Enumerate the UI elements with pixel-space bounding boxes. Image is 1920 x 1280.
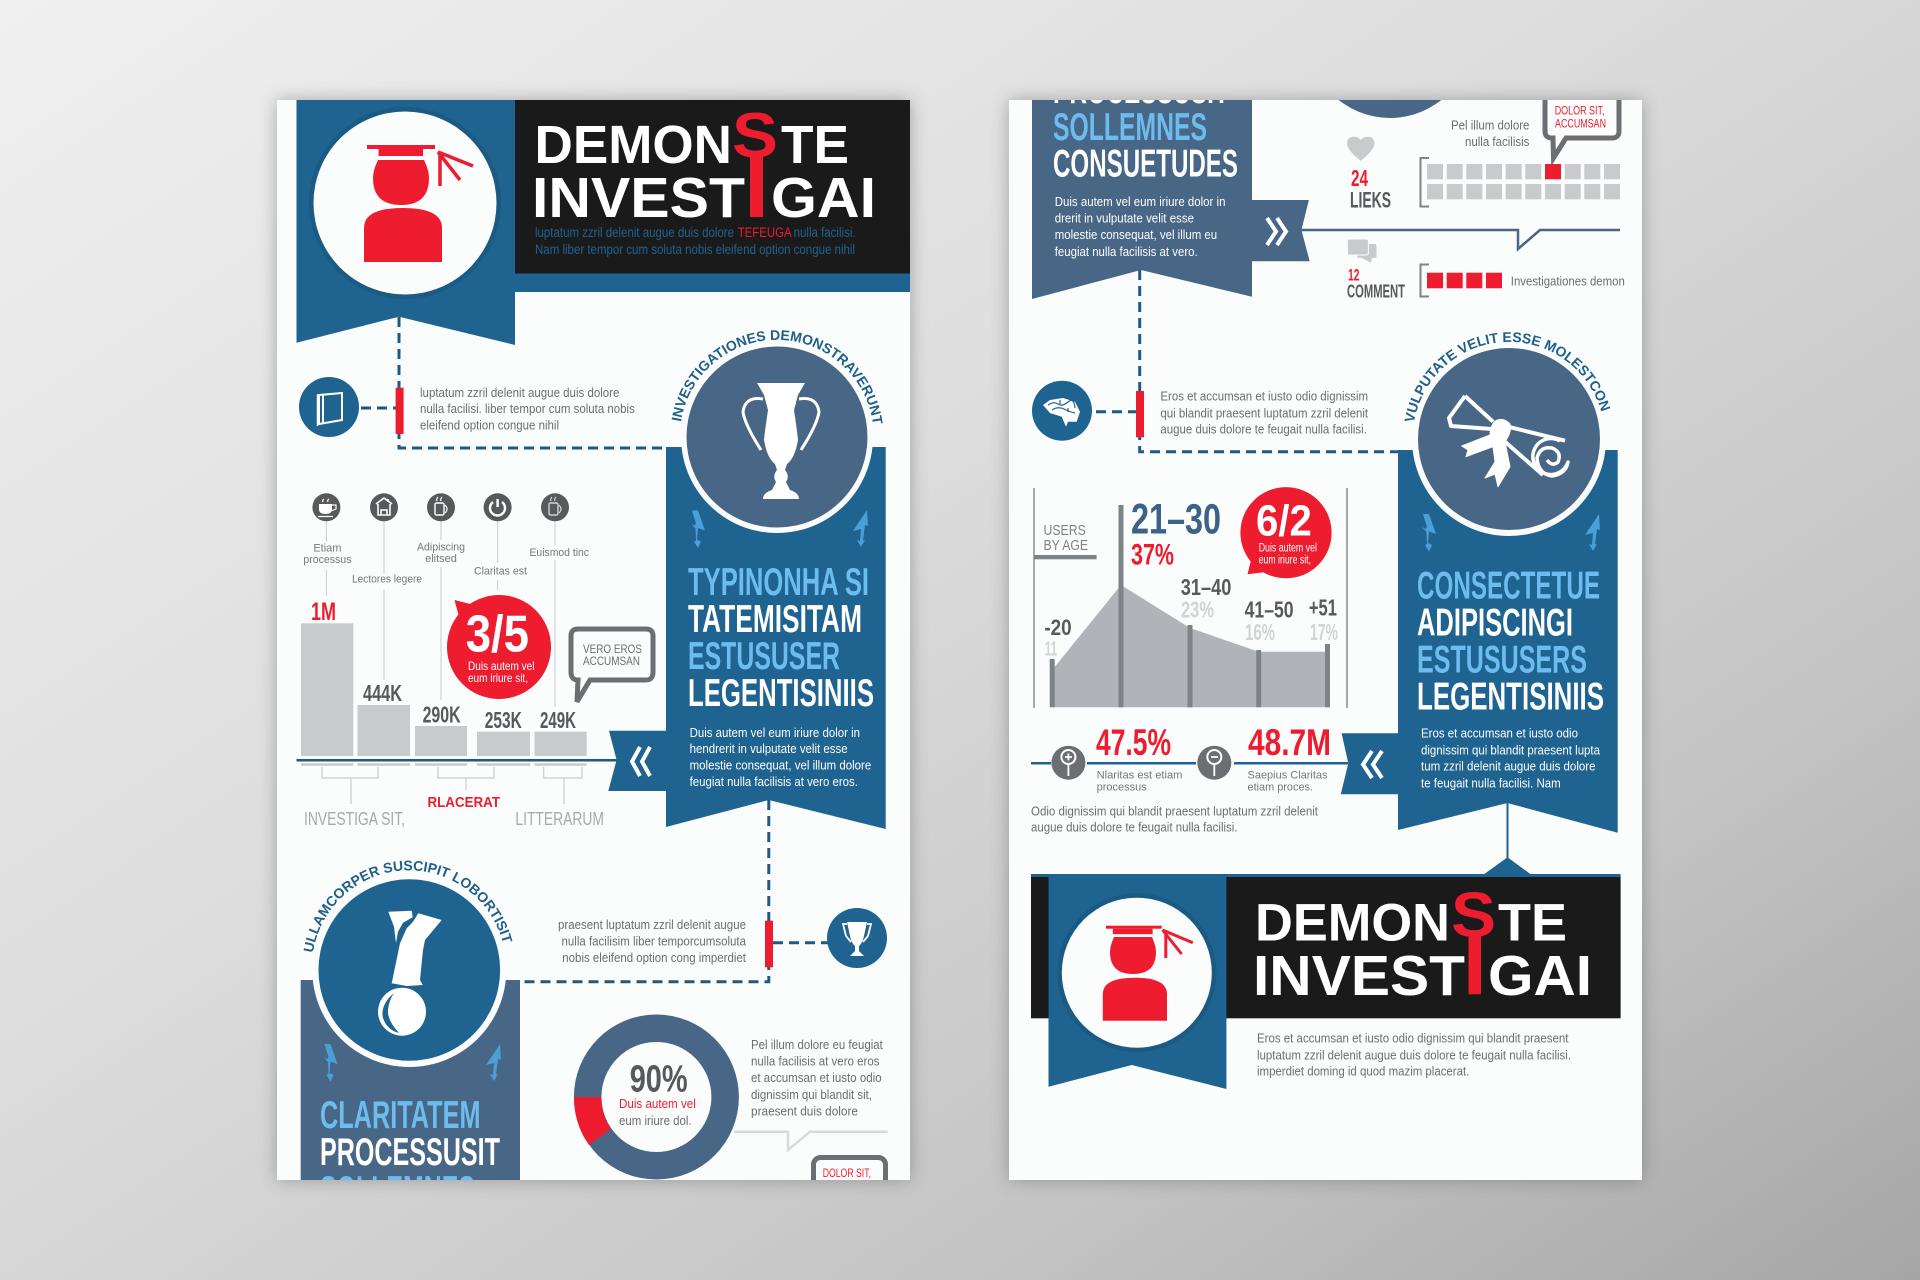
text block 3: qui blandit praesent luptatum zzril delenit: [1160, 405, 1368, 420]
speech line: [734, 1132, 888, 1150]
callout: vero eros: [571, 629, 653, 702]
title: DEMON: [1255, 894, 1450, 953]
age labels: +51: [1309, 595, 1337, 621]
title: S: [1451, 880, 1496, 950]
bar values: 1M: [311, 598, 336, 626]
stat captions: [1097, 770, 1328, 794]
callout labels: Claritas est: [474, 566, 527, 578]
bar group labels: INVESTIGA SIT,: [304, 809, 405, 829]
lightning bolts: [324, 1044, 501, 1082]
callout: dolor sit top: [1545, 90, 1619, 158]
comments value: 12: [1348, 266, 1360, 285]
callout: dolor sit top: ACCUMSAN: [1555, 116, 1606, 130]
donut chart: [574, 1014, 739, 1180]
donut description: et accumsan et iusto odio: [751, 1070, 882, 1085]
icon: diploma: [1449, 396, 1568, 487]
bar values: 444K: [363, 680, 402, 706]
icon: big trophy: [743, 383, 819, 499]
callout labels: Lectores legere: [352, 574, 422, 586]
age labels: -20: [1044, 615, 1072, 640]
heading: [321, 1101, 500, 1180]
text block 2: nobis eleifend option cong imperdiet: [562, 950, 746, 965]
red marker 3: [1136, 391, 1144, 437]
icon: mug 2: [541, 493, 569, 521]
icon: medal: [378, 911, 442, 1036]
paragraph: dignissim qui blandit praesent lupta: [1421, 742, 1601, 757]
callout labels: Etiam: [313, 543, 341, 555]
icon: graduate: [364, 145, 473, 262]
bar values: [311, 598, 576, 733]
heading: SOLLEMNES: [1053, 106, 1207, 149]
paragraph: te feugait nulla facilisi. Nam: [1421, 776, 1561, 791]
panel: left page: [277, 100, 910, 1180]
likes caption: Pel illum dolore: [1451, 117, 1529, 132]
chart title: [1044, 522, 1088, 554]
paragraph: hendrerit in vulputate velit esse: [690, 741, 848, 756]
comments grid: [1420, 264, 1625, 296]
age labels: 17%: [1310, 619, 1338, 645]
callout: 3/5: [447, 595, 551, 699]
likes value: LIEKS: [1350, 187, 1391, 212]
icon: graduate: [1103, 926, 1193, 1021]
subtitle: [535, 225, 856, 257]
heading: [1053, 69, 1238, 186]
icon: house: [370, 493, 398, 521]
donut remainder: [1308, 0, 1472, 118]
paragraph: Duis autem vel eum iriure dolor in: [690, 725, 860, 740]
donut description: [751, 1037, 883, 1118]
text block 1: eleifend option congue nihil: [420, 418, 559, 432]
circular heading: ULLAMCORPER SUSCIPIT LOBORTISIT: [304, 860, 512, 952]
dashed connector 2: [523, 800, 828, 982]
footer banner: [1031, 874, 1621, 1089]
lightning bolts: [1422, 514, 1600, 552]
icon: mug: [427, 493, 455, 521]
icon: zoom in: [1051, 746, 1085, 780]
icon: comments: [1347, 239, 1376, 263]
likes caption: [1451, 117, 1530, 149]
likes value: 24: [1351, 165, 1368, 191]
title: TE: [1498, 894, 1567, 953]
comments value: COMMENT: [1347, 281, 1405, 301]
footer text: luptatum zzril delenit augue duis dolore te feugait nulla facilisi.: [1257, 1047, 1571, 1062]
heading: ADIPISCINGI: [1417, 602, 1573, 645]
icon: heart: [1347, 137, 1374, 161]
paragraph: [690, 725, 871, 789]
text block 1: luptatum zzril delenit augue duis dolore: [420, 385, 619, 400]
circular heading: VULPUTATE VELIT ESSE MOLESTCON: [1404, 332, 1610, 421]
chevrons: [632, 747, 650, 776]
donut chart: eum iriure dol.: [619, 1113, 692, 1128]
ribbon: sollemnes: [1032, 69, 1310, 299]
callout: vero eros: VERO EROS: [583, 642, 642, 656]
paragraph: molestie consequat, vel illum eu: [1055, 227, 1217, 242]
chevrons: [1363, 751, 1382, 778]
chart title: USERS: [1044, 522, 1086, 539]
text block 1: [420, 385, 635, 432]
footer text: imperdiet doming id quod mazim placerat.: [1257, 1063, 1469, 1078]
chevrons: [1267, 218, 1286, 245]
heading: SOLLEMNES: [320, 1169, 475, 1212]
red marker 1: [396, 388, 404, 434]
callout: dolor sit top: DOLOR SIT,: [1555, 104, 1604, 118]
callout: 6/2: 6/2: [1256, 497, 1312, 546]
donut description: praesent duis dolore: [751, 1103, 858, 1118]
donut description: nulla facilisis at vero eros: [751, 1054, 880, 1069]
stat captions: etiam proces.: [1248, 782, 1313, 794]
heading: CONSUETUDES: [1053, 143, 1238, 186]
icon: brain: [1032, 381, 1092, 441]
stat captions: Nlaritas est etiam: [1097, 770, 1182, 782]
callout: 6/2: eum iriure sit,: [1259, 554, 1311, 566]
bar group labels: [305, 797, 603, 828]
callout: dolor sit bottom: [814, 1158, 886, 1208]
paragraph: Duis autem vel eum iriure dolor in: [1055, 194, 1226, 209]
age labels: 21–30: [1131, 495, 1221, 543]
panel: claritatem: [300, 860, 520, 1180]
callout lines: [326, 521, 555, 707]
text block 2: praesent luptatum zzril delenit augue: [558, 917, 746, 932]
donut chart: 90%: [630, 1059, 688, 1101]
icon: cup: [312, 493, 340, 521]
footer text: Eros et accumsan et iusto odio dignissim qui blandit praesent: [1257, 1031, 1569, 1046]
heading: LEGENTISINIIS: [1417, 675, 1604, 718]
title: INVEST: [532, 166, 745, 230]
panel: right page: [1009, 100, 1642, 1180]
icon: power: [484, 493, 512, 521]
stat values: [1096, 722, 1331, 763]
title: DEMON: [534, 115, 732, 175]
stat values: 48.7M: [1248, 722, 1331, 763]
age labels: 31–40: [1181, 574, 1231, 600]
stats row: [1031, 722, 1348, 794]
bar group labels: RLACERAT: [428, 795, 500, 811]
bar values: 249K: [540, 707, 576, 733]
title: [1253, 880, 1592, 1008]
dashed connector 3: [1096, 270, 1400, 452]
bar group labels: LITTERARUM: [515, 809, 604, 829]
title: GAI: [771, 166, 876, 230]
text block 3: [1160, 389, 1368, 436]
callout labels: elitsed: [425, 553, 457, 565]
heading: CONSECTETUE: [1417, 564, 1600, 607]
text block 3: augue duis dolore te feugait nulla facilisi.: [1160, 421, 1367, 436]
title: TE: [781, 115, 849, 175]
callout: dolor sit bottom: DOLOR SIT,: [823, 1166, 871, 1180]
ribbon: consectetue: [1340, 332, 1618, 833]
likes value: [1350, 165, 1391, 212]
stat captions: Saepius Claritas: [1248, 770, 1328, 782]
area chart: [1034, 488, 1347, 708]
footer connector: [1484, 803, 1531, 874]
heading: PROCESSUSIT: [1053, 69, 1229, 112]
age labels: 37%: [1131, 538, 1174, 571]
callout: 3/5: Duis autem vel: [468, 659, 534, 673]
ribbon: typinonha: [608, 330, 886, 829]
speech divider: [1301, 230, 1620, 249]
callout: vero eros: ACCUMSAN: [583, 654, 640, 668]
paragraph: tum zzril delenit augue duis dolore: [1421, 759, 1596, 774]
footer text: [1257, 1031, 1571, 1078]
heading: PROCESSUSIT: [320, 1131, 500, 1174]
donut chart: Duis autem vel: [619, 1096, 696, 1111]
callout labels: Euismod tinc: [530, 547, 589, 559]
likes caption: nulla facilisis: [1465, 134, 1530, 149]
likes grid: [1420, 158, 1620, 206]
heading: CLARITATEM: [320, 1094, 480, 1137]
callout labels: processus: [303, 554, 352, 566]
age labels: 11: [1045, 639, 1057, 661]
callout labels: Adipiscing: [417, 542, 465, 554]
donut description: Pel illum dolore eu feugiat: [751, 1037, 883, 1052]
age labels: [1044, 495, 1338, 661]
heading: [688, 568, 874, 706]
age labels: 23%: [1181, 597, 1214, 623]
header banner: [296, 100, 910, 345]
bar values: 290K: [423, 702, 461, 728]
icon: zoom out: [1197, 746, 1231, 780]
callout: 3/5: 3/5: [466, 606, 529, 664]
heading: ESTUSUSER: [688, 635, 840, 678]
text block 3: Eros et accumsan et iusto odio dignissim: [1160, 389, 1368, 404]
lightning bolts: [691, 510, 868, 548]
heading: ESTUSUSERS: [1417, 639, 1587, 682]
bar chart: [296, 598, 616, 829]
age labels: 16%: [1245, 619, 1275, 645]
stat captions: processus: [1097, 782, 1147, 794]
heading: [1417, 564, 1604, 718]
paragraph: feugiat nulla facilisis at vero eros.: [690, 774, 858, 789]
paragraph: [1055, 194, 1226, 259]
chart note: augue duis dolore te feugait nulla facilisi.: [1031, 820, 1238, 835]
text block 2: nulla facilisim liber temporcumsoluta: [562, 934, 747, 949]
callout labels: [303, 542, 589, 586]
paragraph: Eros et accumsan et iusto odio: [1421, 726, 1578, 741]
heading: TATEMISITAM: [688, 598, 862, 641]
bar values: 253K: [485, 707, 522, 733]
paragraph: drerit in vulputate velit esse: [1055, 210, 1194, 225]
subtitle: luptatum zzril delenit augue duis dolore: [535, 225, 734, 240]
subtitle: Nam liber tempor cum soluta nobis eleifend option congue nihil: [535, 242, 855, 257]
icon: book: [299, 377, 359, 437]
circular heading: INVESTIGATIONES DEMONSTRAVERUNT: [672, 330, 883, 424]
text block 1: nulla facilisi. liber tempor cum soluta nobis: [420, 401, 635, 416]
title: S: [732, 101, 778, 171]
red marker 2: [765, 921, 773, 967]
paragraph: [1421, 726, 1601, 791]
heading: TYPINONHA SI: [688, 561, 869, 604]
subtitle: nulla facilisi.: [794, 225, 856, 240]
chart note: [1031, 803, 1318, 835]
subtitle: TEFEUGA: [738, 225, 792, 240]
dashed connector 1: [361, 317, 668, 448]
callout: 6/2: [1240, 487, 1332, 578]
icon: small trophy: [827, 908, 887, 968]
paragraph: feugiat nulla facilisis at vero.: [1055, 244, 1198, 259]
age labels: 41–50: [1245, 597, 1294, 623]
heading: LEGENTISINIIS: [688, 672, 874, 715]
comments value: [1347, 266, 1405, 301]
chart title: BY AGE: [1044, 537, 1088, 554]
donut description: dignissim qui blandit sit,: [751, 1087, 872, 1102]
callout: 6/2: Duis autem vel: [1259, 543, 1317, 555]
title: [536, 112, 872, 218]
text block 2: [558, 917, 747, 965]
stat values: 47.5%: [1096, 722, 1171, 763]
paragraph: molestie consequat, vel illum dolore: [690, 758, 871, 772]
title: INVEST: [1253, 944, 1465, 1008]
comments grid: Investigationes demon: [1511, 274, 1625, 289]
callout: 3/5: eum iriure sit,: [468, 671, 528, 685]
chart note: Odio dignissim qui blandit praesent luptatum zzril delenit: [1031, 803, 1318, 818]
title: GAI: [1488, 944, 1592, 1008]
